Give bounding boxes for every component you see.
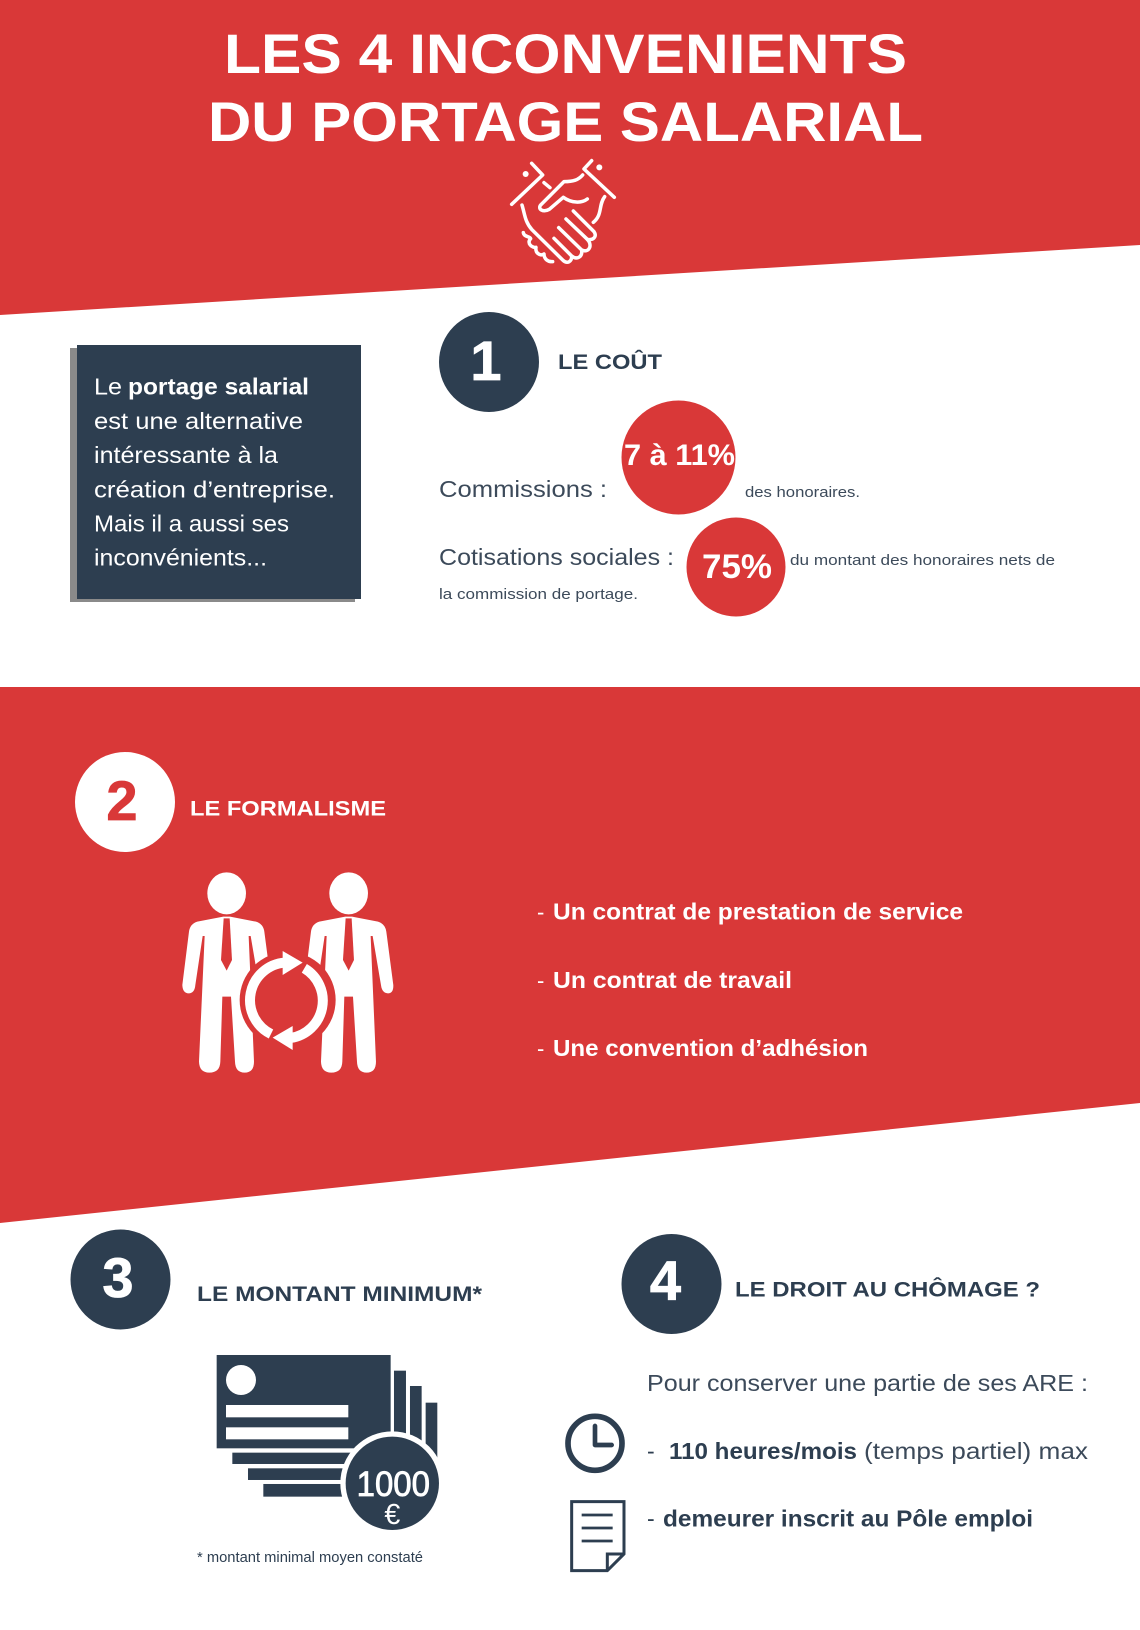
icon: banknotes 1000 euros xyxy=(217,1355,444,1535)
intro text: création d’entreprise. xyxy=(94,476,335,502)
intro text: intéressante à la xyxy=(94,442,278,468)
formalisme list: - xyxy=(537,900,544,924)
hours line: 110 heures/mois xyxy=(669,1438,857,1464)
footnote: * montant minimal moyen constaté xyxy=(197,1549,423,1566)
hours line: (temps partiel) max xyxy=(864,1438,1089,1464)
panel: red band formalisme xyxy=(0,687,1140,1223)
icon: banknotes 1000 euros: 1000 xyxy=(357,1465,430,1504)
hours line xyxy=(647,1438,1089,1464)
number badge 3: 3 xyxy=(102,1246,134,1309)
formalisme list: - xyxy=(537,968,544,993)
icon: two businessmen with exchange arrows xyxy=(182,872,393,1073)
intro text: est une alternative xyxy=(94,408,303,434)
number badge 3 xyxy=(70,1230,170,1330)
panel: header red band xyxy=(0,0,1140,315)
icon: clock xyxy=(568,1416,622,1470)
heading: le formalisme: LE FORMALISME xyxy=(190,798,386,820)
commissions row: des honoraires. xyxy=(745,484,860,501)
number badge 2: 2 xyxy=(106,769,138,832)
heading: le cout: LE COÛT xyxy=(558,350,662,374)
icon: handshake xyxy=(512,161,614,262)
commissions row: 7 à 11% xyxy=(624,439,735,472)
number badge 1 xyxy=(439,312,539,412)
registration line: demeurer inscrit au Pôle emploi xyxy=(663,1506,1033,1532)
number badge 4: 4 xyxy=(650,1249,681,1312)
commissions row: Commissions : xyxy=(439,476,607,502)
intro text: inconvénients... xyxy=(94,544,267,570)
heading: le montant minimum: LE MONTANT MINIMUM* xyxy=(197,1283,483,1306)
cotisations row: Cotisations sociales : xyxy=(439,544,674,570)
formalisme list: Un contrat de prestation de service xyxy=(553,898,963,924)
intro line: Pour conserver une partie de ses ARE : xyxy=(647,1370,1088,1396)
title xyxy=(208,22,923,153)
registration line: - xyxy=(647,1506,655,1532)
intro text: portage salarial xyxy=(128,374,309,400)
icon: document xyxy=(572,1502,624,1571)
cotisations row: la commission de portage. xyxy=(439,586,638,603)
formalisme list xyxy=(537,898,963,1061)
intro text: Le xyxy=(94,374,122,400)
number badge 4 xyxy=(622,1234,722,1334)
number badge 1: 1 xyxy=(470,329,502,392)
cotisations row: 75% xyxy=(702,548,772,586)
commissions row xyxy=(439,400,860,514)
number badge 2 xyxy=(75,752,175,852)
intro text: Mais il a aussi ses xyxy=(94,510,289,536)
hours line: - xyxy=(647,1438,655,1464)
formalisme list: Une convention d’adhésion xyxy=(553,1035,868,1061)
formalisme list: - xyxy=(537,1036,544,1061)
cotisations row xyxy=(439,518,1055,616)
title: LES 4 INCONVENIENTS xyxy=(224,22,907,85)
heading: le droit au chomage: LE DROIT AU CHÔMAGE ? xyxy=(735,1278,1040,1302)
icon: banknotes 1000 euros: € xyxy=(384,1499,400,1531)
intro text xyxy=(94,374,335,570)
panel: intro text box xyxy=(70,345,361,602)
title: DU PORTAGE SALARIAL xyxy=(208,90,923,153)
formalisme list: Un contrat de travail xyxy=(553,967,792,993)
cotisations row: du montant des honoraires nets de xyxy=(790,552,1055,569)
